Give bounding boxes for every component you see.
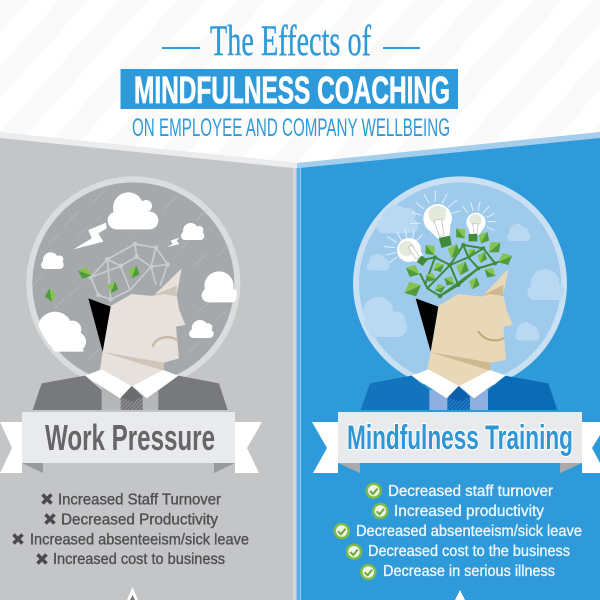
light rays bbox=[384, 191, 497, 263]
collar bbox=[85, 369, 178, 398]
background bbox=[0, 0, 600, 175]
item: illness: Decrease in serious illness bbox=[383, 563, 555, 580]
item: absenteeism: Decreased absenteeism/sick leave bbox=[356, 523, 582, 540]
illustration: stressed head bbox=[29, 179, 238, 410]
suit bbox=[361, 376, 557, 410]
circle backdrop bbox=[29, 179, 237, 387]
list: mindfulness effects bbox=[335, 483, 582, 580]
wire brain bbox=[88, 242, 170, 302]
item: staff turnover: Increased Staff Turnover bbox=[58, 492, 221, 508]
heading: work pressure: Work Pressure bbox=[45, 417, 215, 458]
leaves bbox=[401, 224, 515, 300]
title: The Effects of: The Effects of bbox=[210, 18, 371, 65]
suit bbox=[33, 376, 228, 410]
panel: work pressure bbox=[0, 132, 298, 600]
item: cost: Increased cost to business bbox=[53, 551, 225, 568]
list: work pressure effects bbox=[14, 492, 249, 568]
illustration: mindful head bbox=[356, 179, 566, 410]
item: productivity: Decreased Productivity bbox=[61, 512, 218, 528]
clouds bbox=[38, 192, 238, 352]
branch network bbox=[420, 243, 505, 298]
head bbox=[416, 269, 513, 387]
item: staff turnover: Decreased staff turnover bbox=[388, 483, 553, 500]
leaves bbox=[44, 264, 142, 303]
arrow tip: left bbox=[127, 587, 138, 600]
rain bbox=[33, 190, 228, 360]
clouds bbox=[363, 205, 566, 340]
item: absenteeism: Increased absenteeism/sick leave bbox=[30, 532, 249, 548]
item: cost: Decreased cost to the business bbox=[368, 543, 570, 560]
heading: mindfulness coaching bbox=[120, 69, 458, 112]
item: productivity: Increased productivity bbox=[394, 503, 544, 520]
icon: lightning bolts bbox=[73, 223, 179, 249]
light bulbs bbox=[397, 204, 486, 266]
arrow tip: right bbox=[455, 590, 465, 600]
panel: mindfulness training bbox=[296, 132, 600, 600]
circle backdrop bbox=[356, 179, 564, 387]
head bbox=[88, 268, 185, 387]
ribbon: mindfulness training bbox=[312, 412, 600, 473]
collar bbox=[412, 369, 506, 398]
ribbon: work pressure bbox=[0, 412, 262, 473]
